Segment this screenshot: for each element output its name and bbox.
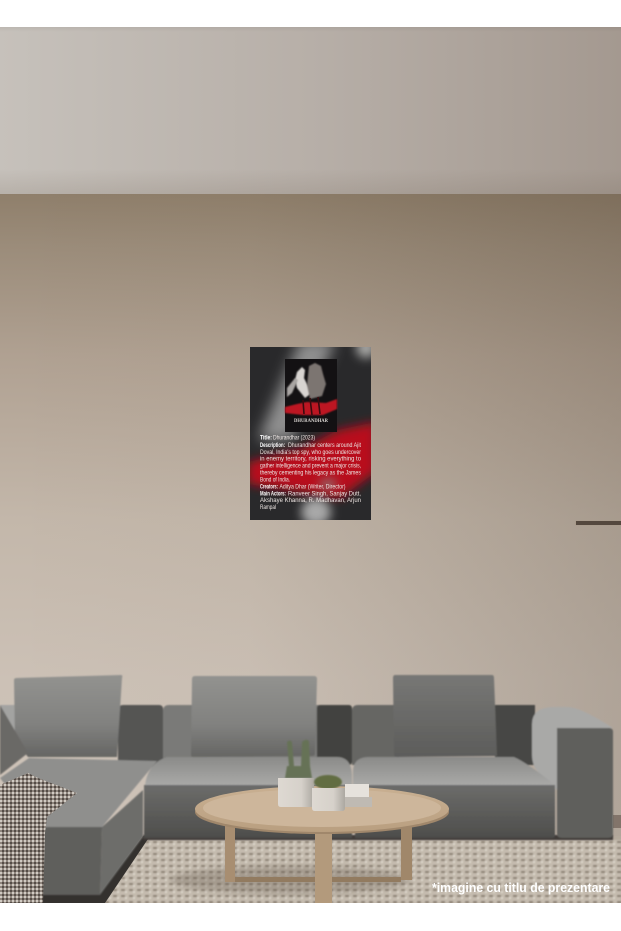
- table legs: [225, 826, 412, 903]
- poster information text: Description:: [260, 442, 285, 449]
- poster information text: thereby cementing his legacy as the James: [260, 470, 361, 477]
- table shadow on rug: [170, 866, 410, 894]
- poster information text: Akshaye Khanna, R. Madhavan, Arjun: [260, 497, 362, 504]
- poster film title: DHURANDHAR: [294, 418, 328, 424]
- sofa back: [0, 705, 535, 767]
- poster blurred background: [250, 347, 371, 520]
- poster information text: Aditya Dhar (Writer, Director): [280, 483, 346, 490]
- right arm: [532, 707, 613, 838]
- succulent pot: [312, 775, 345, 811]
- table top: [195, 786, 449, 834]
- wall lamp: [576, 521, 621, 525]
- right seat: [353, 757, 555, 838]
- sofa: [0, 675, 613, 895]
- poster information text: Title:: [260, 434, 272, 441]
- ceiling: [0, 27, 621, 194]
- pillow left: [14, 675, 122, 757]
- poster information text: Bond of India.: [260, 476, 290, 484]
- stacked books: [345, 784, 372, 807]
- coffee table: [195, 740, 449, 903]
- centre seat: [144, 757, 352, 838]
- wall: [0, 194, 621, 844]
- poster information text: Rampal: [260, 504, 276, 511]
- poster information text: [260, 434, 362, 511]
- poster information text: Dhurandhar centers around Ajit: [288, 442, 361, 449]
- poster information text: in enemy territory, risking everything to: [260, 456, 362, 463]
- poster information text: Main Actors:: [260, 490, 286, 497]
- poster information text: Doval, India's top spy, who goes undercover: [260, 449, 361, 456]
- poster information text: gather intelligence and prevent a major crisis,: [260, 463, 361, 470]
- poster information text: Creators:: [260, 483, 278, 490]
- poster information text: Dhurandhar (2023): [273, 434, 315, 441]
- inner movie poster: [285, 359, 337, 432]
- left seat: [0, 758, 157, 895]
- poster information text: Ranveer Singh, Sanjay Dutt,: [288, 490, 361, 497]
- cactus pot: [278, 740, 314, 807]
- rug and floor: [0, 815, 621, 903]
- blanket: [0, 773, 77, 903]
- image caption: *imagine cu titlu de prezentare: [432, 881, 610, 895]
- pillow centre: [191, 676, 317, 757]
- dark side pillow: [0, 705, 28, 775]
- pillow right: [393, 675, 497, 757]
- framed poster: [250, 347, 371, 520]
